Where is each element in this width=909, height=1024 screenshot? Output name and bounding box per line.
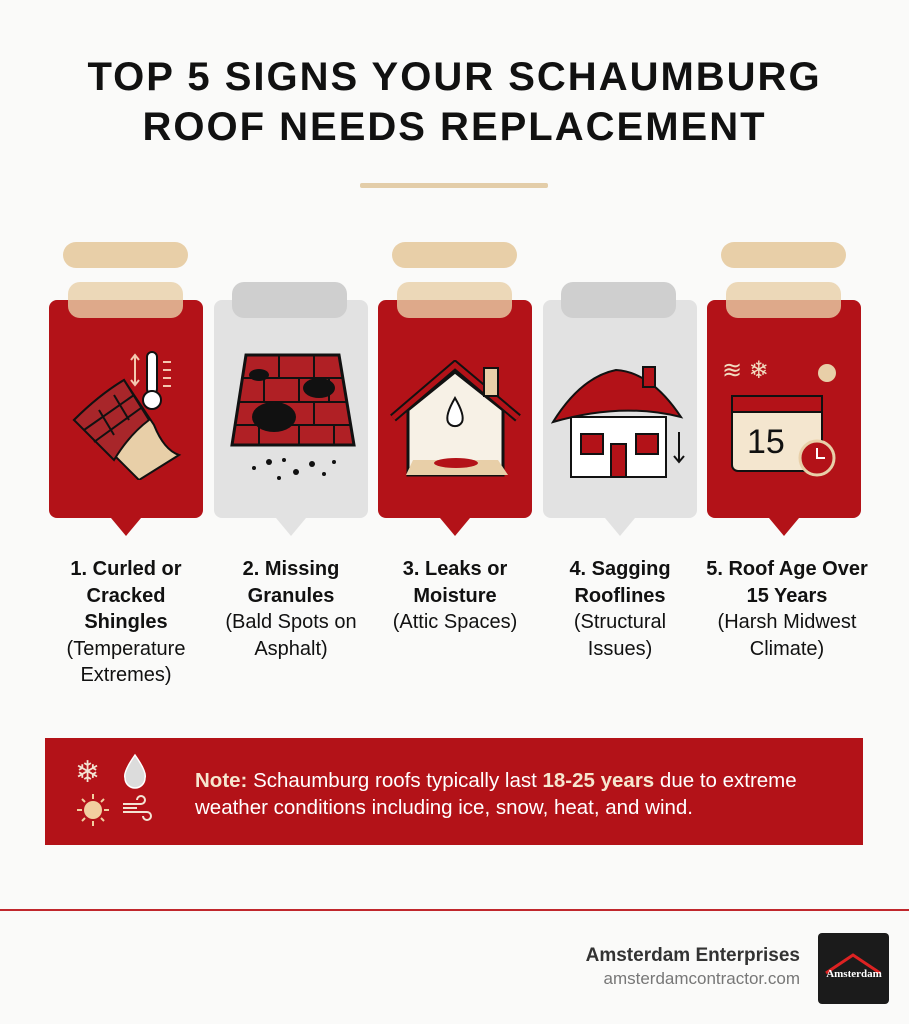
note box — [45, 738, 863, 845]
icon: calendar 15: 15 — [747, 423, 785, 461]
text: 4. Sagging Rooflines — [569, 558, 671, 606]
card 1 — [49, 300, 203, 518]
labels: 1. Curled or Cracked Shingles — [70, 558, 182, 633]
icon: calendar 15 — [722, 357, 836, 476]
card 5 — [707, 300, 861, 518]
text: 3. Leaks or Moisture — [403, 558, 507, 606]
card 2 — [214, 300, 368, 518]
card 3 — [378, 300, 532, 518]
note text: Note: Schaumburg roofs typically last 18-25 years due to extreme weather conditions including ice, snow, heat, and wind. — [195, 769, 797, 819]
weather icons: ❄ — [75, 756, 100, 789]
icon: calendar 15: ≋ ❄ — [722, 357, 769, 384]
footer brand: Amsterdam Enterprises — [586, 945, 800, 966]
icon: leaking house — [390, 360, 521, 476]
text: (Structural Issues) — [574, 611, 666, 660]
weather icons — [75, 754, 152, 826]
title — [87, 55, 822, 149]
pills — [63, 242, 188, 268]
title: ROOF NEEDS REPLACEMENT — [142, 105, 767, 149]
text: 5. Roof Age Over 15 Years — [706, 558, 868, 606]
labels: (Temperature Extremes) — [67, 638, 185, 686]
text: 2. Missing Granules — [243, 558, 339, 606]
text: (Bald Spots on Asphalt) — [225, 611, 357, 660]
labels — [67, 558, 185, 686]
icon: sagging house — [551, 366, 685, 478]
card 4 — [543, 300, 697, 518]
icon: curled shingles — [72, 351, 182, 480]
icon: missing granules — [230, 354, 356, 480]
footer brand: amsterdamcontractor.com — [603, 969, 800, 988]
logo: Amsterdam — [826, 968, 882, 980]
text: (Harsh Midwest Climate) — [718, 611, 856, 660]
text: (Attic Spaces) — [393, 611, 517, 633]
title: TOP 5 SIGNS YOUR SCHAUMBURG — [87, 55, 822, 99]
logo — [818, 933, 889, 1004]
footer brand — [586, 945, 800, 988]
